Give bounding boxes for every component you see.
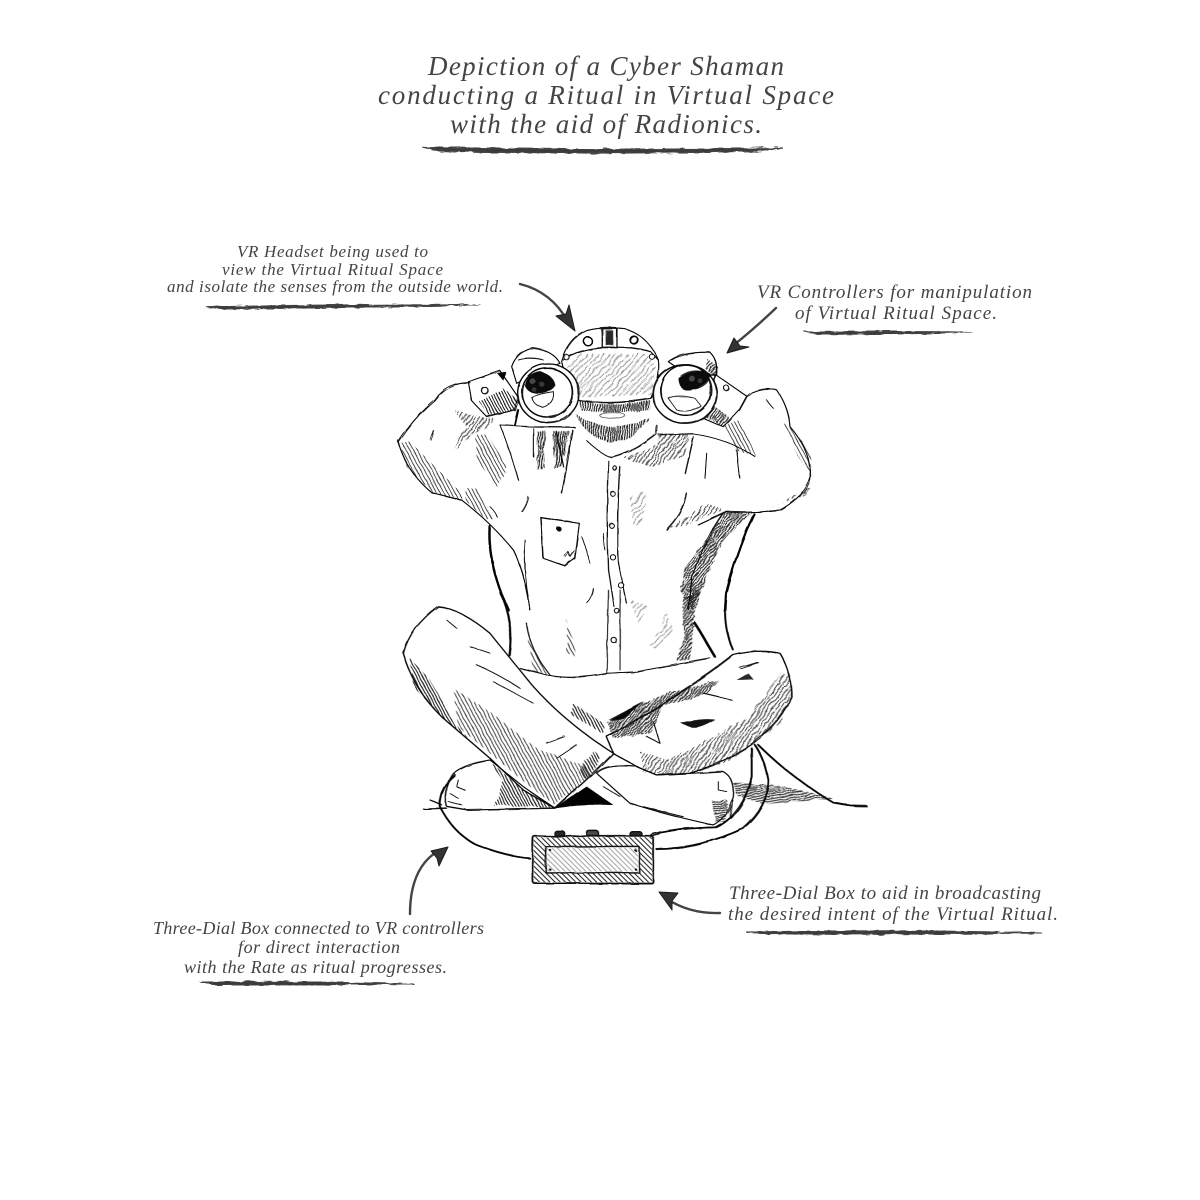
- right controller: [653, 365, 717, 423]
- shirt placket and buttons: [607, 461, 627, 607]
- callout: three-dial box connected: Three-Dial Box connected to VR controllers: [153, 918, 484, 938]
- waist: [520, 590, 710, 677]
- callout: three-dial box broadcasting: Three-Dial Box to aid in broadcasting: [729, 883, 1041, 904]
- headset: [562, 328, 659, 402]
- title: [378, 51, 834, 139]
- shirt and arms: [398, 383, 811, 610]
- shirt hatching: [401, 410, 811, 610]
- cables behind body: [490, 514, 754, 610]
- callout: VR controllers: [757, 282, 1032, 334]
- left foot: [445, 760, 555, 810]
- callout: three-dial box broadcasting: the desired intent of the Virtual Ritual.: [728, 904, 1058, 925]
- callout: VR headset: and isolate the senses from the outside world.: [167, 277, 503, 296]
- title: Depiction of a Cyber Shaman: [427, 51, 784, 81]
- title: conducting a Ritual in Virtual Space: [378, 80, 834, 110]
- floor shadow: [423, 783, 833, 809]
- arrow: to box: [659, 892, 720, 913]
- title underline: [422, 147, 783, 153]
- left controller: [518, 364, 579, 423]
- right leg: [607, 651, 792, 775]
- callout: three-dial box connected: [153, 918, 484, 985]
- callout: VR headset: view the Virtual Ritual Space: [222, 260, 443, 279]
- arrow: to cable: [410, 847, 448, 914]
- figure: cyber shaman sketch: [398, 328, 867, 883]
- left leg crossing: [403, 607, 613, 808]
- shirt pocket: [525, 517, 605, 597]
- callout: VR controllers: of Virtual Ritual Space.: [795, 303, 997, 324]
- right foot: [597, 766, 734, 825]
- callout: three-dial box connected: for direct interaction: [238, 937, 400, 957]
- callout: VR headset: VR Headset being used to: [237, 242, 428, 261]
- left hand and cuff: [468, 348, 560, 425]
- three-dial box: [533, 831, 653, 883]
- callout: three-dial box connected: with the Rate as ritual progresses.: [184, 957, 447, 977]
- title: with the aid of Radionics.: [450, 109, 762, 139]
- dark shadow between feet: [555, 787, 613, 808]
- callout: three-dial box broadcasting: [728, 883, 1058, 934]
- arrow: to controllers: [727, 308, 776, 353]
- right hand and cuff: [668, 352, 747, 427]
- connecting cables: [440, 593, 867, 858]
- lower body: legs, feet, box, cables: [403, 590, 867, 883]
- arrow: to headset: [520, 284, 575, 331]
- callout: VR controllers: VR Controllers for manipulation: [757, 282, 1032, 303]
- upper body: headset, controllers, arms, shirt: [398, 328, 811, 610]
- callout: VR headset: [167, 242, 503, 309]
- beard: [575, 400, 657, 457]
